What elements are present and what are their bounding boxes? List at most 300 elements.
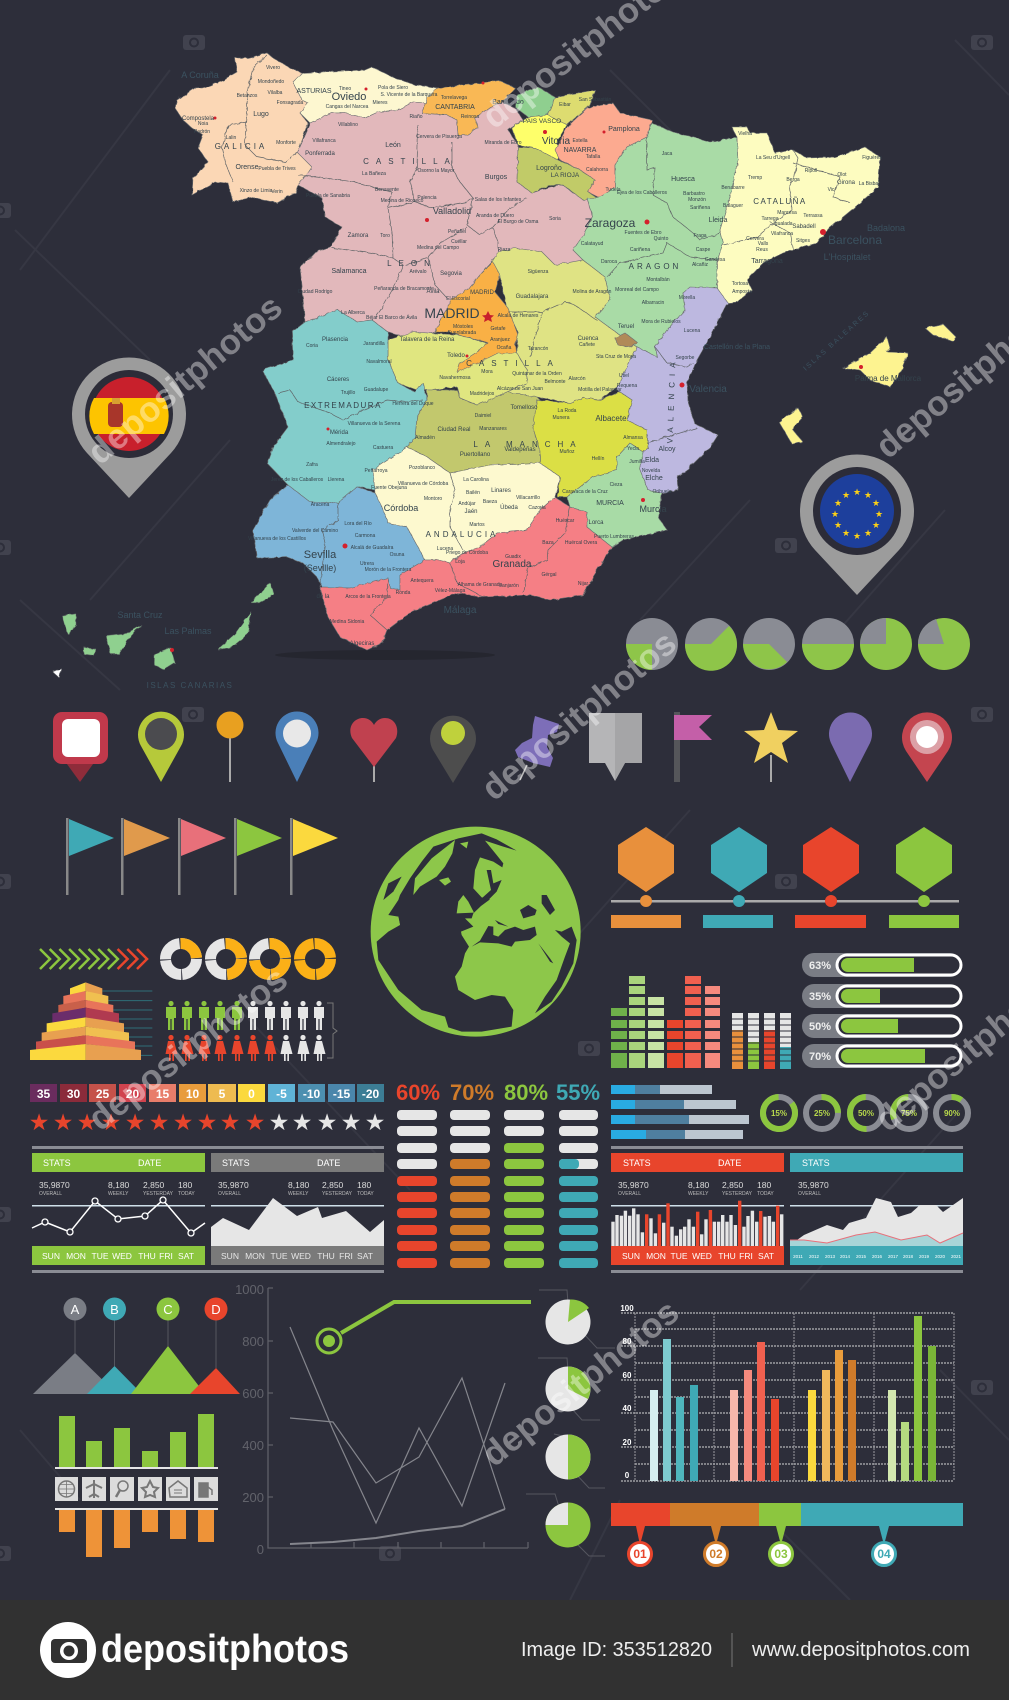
map labels: Salas de los Infantes xyxy=(475,197,522,203)
panel: teal stats area chart: 2012 xyxy=(809,1254,820,1259)
map labels: Berga xyxy=(786,177,800,183)
map labels: Riaza xyxy=(498,247,511,253)
map labels: Daimiel xyxy=(475,413,491,419)
temperature scale: 0 xyxy=(248,1087,255,1101)
map labels: Novelda xyxy=(642,468,660,474)
panel: red stats bar chart xyxy=(611,1153,784,1265)
map labels: Ciudad Real xyxy=(437,427,471,433)
panel: red stats bar chart: YESTERDAY xyxy=(722,1191,753,1197)
map labels: Sta Cruz de Moya xyxy=(596,354,636,360)
map labels: de la xyxy=(316,594,330,600)
EU flag: ★ xyxy=(842,529,850,539)
EU flag: ★ xyxy=(842,491,850,501)
panel: teal stats area chart xyxy=(790,1153,963,1265)
map labels: Riaño xyxy=(409,114,423,120)
image id: Image ID: 353512820 xyxy=(521,1639,712,1661)
map labels: Fraga xyxy=(693,233,707,239)
panel: grey stats area chart: YESTERDAY xyxy=(322,1191,353,1197)
map labels: Gérgal xyxy=(541,572,557,578)
map labels: Alcázar de San Juan xyxy=(497,386,543,392)
map labels: GALICIA xyxy=(215,142,267,151)
map labels: Alhama de Granada xyxy=(458,582,503,588)
map labels: MADRID xyxy=(470,290,494,296)
panel: green stats line chart xyxy=(32,1153,205,1265)
flag row xyxy=(66,818,338,895)
panel: green stats line chart: 8,180 xyxy=(108,1180,130,1190)
y axis labels: 400 xyxy=(242,1438,264,1453)
map labels: Plasencia xyxy=(322,337,349,343)
map labels: Alarcón xyxy=(569,376,586,382)
map labels: VALENCIA xyxy=(665,356,678,444)
map labels: Cangas del Narcea xyxy=(326,104,369,110)
map labels: MURCIA xyxy=(596,500,624,507)
map labels: Mérida xyxy=(330,430,349,436)
map labels: León xyxy=(385,142,401,149)
icon: blue pin xyxy=(276,711,318,782)
panel: grey stats area chart: SAT xyxy=(357,1251,373,1261)
EU flag: ★ xyxy=(853,488,861,498)
map labels: Barbastro xyxy=(683,191,705,197)
map labels: Tarancón xyxy=(528,346,548,352)
dark coastal labels: Málaga xyxy=(444,605,477,616)
map labels: Barakaldo xyxy=(492,99,524,106)
map labels: Sitges xyxy=(796,238,810,244)
panel: grey stats area chart xyxy=(211,1153,384,1265)
star rating: ★ xyxy=(341,1110,361,1136)
panel: grey stats area chart: STATS xyxy=(222,1158,250,1168)
panel: red stats bar chart: TODAY xyxy=(757,1191,774,1197)
panel: grey stats area chart: WED xyxy=(291,1251,311,1261)
depositphotos logo xyxy=(40,1622,349,1678)
map labels: Arcos de la Frontera xyxy=(345,594,391,600)
temperature scale: -20 xyxy=(362,1087,379,1101)
map labels: La Roda xyxy=(558,408,577,414)
map labels: Jaén xyxy=(464,509,478,515)
panel: green stats line chart: WEEKLY xyxy=(108,1191,129,1197)
map labels: Villanueva de los Castillos xyxy=(248,536,306,542)
grouped bar chart: 20 xyxy=(623,1438,632,1447)
map labels: Cervera de Pisuerga xyxy=(416,134,462,140)
map labels: Cuéllar xyxy=(451,239,467,245)
grouped bar chart: 80 xyxy=(623,1337,632,1346)
progress bars xyxy=(802,953,962,1068)
map labels: Carmona xyxy=(355,533,375,539)
map labels: Balaguer xyxy=(723,203,743,209)
dark coastal labels: ISLAS CANARIAS xyxy=(147,681,233,690)
map labels: Vielha xyxy=(738,131,752,137)
map labels: Guadalupe xyxy=(364,387,388,393)
map labels: Molina de Aragón xyxy=(573,289,612,295)
panel: green stats line chart: TUE xyxy=(92,1251,109,1261)
map labels: Jerez de los Caballeros xyxy=(271,477,324,483)
map labels: Segorbe xyxy=(676,355,695,361)
temperature scale: 5 xyxy=(219,1087,226,1101)
dark coastal labels: ISLAS BALEARES xyxy=(802,309,872,373)
grouped bar chart: 40 xyxy=(623,1404,632,1413)
map labels: Vilafranca xyxy=(771,231,793,237)
map labels: Herrera del Duque xyxy=(392,401,434,407)
EU flag xyxy=(820,474,894,548)
EU flag: ★ xyxy=(872,521,880,531)
map labels: Calahorra xyxy=(586,167,608,173)
panel: grey stats area chart: 35,9870 xyxy=(218,1180,249,1190)
EU flag: ★ xyxy=(831,510,839,520)
y axis labels: 800 xyxy=(242,1334,264,1349)
dark coastal labels xyxy=(117,70,905,690)
map labels: Alcoy xyxy=(658,446,676,453)
map regions xyxy=(53,53,956,678)
map labels: Ejea de los Caballeros xyxy=(617,190,668,196)
star rating: ★ xyxy=(365,1110,385,1136)
map labels: Reus xyxy=(756,247,768,253)
icons: globe, plane, search, star, house, fuel xyxy=(58,1480,212,1498)
map labels: Baeza xyxy=(483,499,497,505)
map labels: Puebla de Sanabria xyxy=(306,193,350,199)
map labels: Vitoria xyxy=(542,136,571,147)
map labels: Ocaña xyxy=(497,345,512,351)
map labels: LA RIOJA xyxy=(551,172,580,179)
panel: green stats line chart: SAT xyxy=(178,1251,194,1261)
map labels: Amposta xyxy=(732,289,752,295)
map labels: Cuenca xyxy=(578,336,599,342)
map labels: Vélez-Málaga xyxy=(435,588,466,594)
map labels: Daroca xyxy=(601,259,617,265)
watermarks: depositphotos xyxy=(80,287,290,472)
panel: green stats line chart: YESTERDAY xyxy=(143,1191,174,1197)
dark coastal labels: Castellón de la Plana xyxy=(704,344,770,351)
icon: purple drop xyxy=(829,712,872,782)
panel: teal stats area chart: STATS xyxy=(802,1158,830,1168)
icon: red square pin xyxy=(53,712,108,782)
panel: grey stats area chart: SUN xyxy=(221,1251,239,1261)
capital star xyxy=(482,311,494,322)
star rating: ★ xyxy=(292,1110,312,1136)
map labels: Murcia xyxy=(639,504,667,514)
panel: grey stats area chart: TUE xyxy=(270,1251,288,1261)
map labels: Tafalla xyxy=(586,154,600,160)
temperature scale: 15 xyxy=(156,1087,169,1101)
map labels: Béjar xyxy=(366,315,378,321)
star rating: ★ xyxy=(269,1110,289,1136)
icon: red target pin xyxy=(902,712,952,782)
map labels: Linares xyxy=(491,488,511,494)
map labels: Lorca xyxy=(588,520,604,526)
map labels: Padrón xyxy=(194,129,210,135)
map labels: Cariñena xyxy=(630,247,650,253)
map labels: Ciudad Rodrigo xyxy=(298,289,333,295)
grouped bar chart: 100 xyxy=(620,1304,634,1313)
map labels: Teruel xyxy=(618,324,634,330)
map labels: Gandesa xyxy=(705,257,725,263)
map labels: Lucena xyxy=(437,546,453,552)
map labels: ASTURIAS xyxy=(296,88,332,95)
map labels: Cervera xyxy=(746,236,764,242)
map labels: Muñoz xyxy=(559,449,575,455)
map labels: Benabarre xyxy=(721,185,745,191)
icon: star pin xyxy=(744,712,798,782)
map labels: Navahermosa xyxy=(439,375,471,381)
panel: green stats line chart: SUN xyxy=(42,1251,60,1261)
map labels: LEON xyxy=(387,259,437,268)
map labels: Motilla del Palancar xyxy=(578,387,622,393)
map labels: Osuna xyxy=(390,552,405,558)
map labels: El Burgo de Osma xyxy=(498,219,539,225)
icon: purple pushpin xyxy=(515,716,559,780)
map labels: Monzón xyxy=(688,197,706,203)
panel: teal stats area chart: 2013 xyxy=(825,1254,836,1259)
watermarks: depositphotos xyxy=(474,623,684,808)
map labels: CANTABRIA xyxy=(435,104,475,111)
star rating: ★ xyxy=(317,1110,337,1136)
map labels: Orihuela xyxy=(653,489,672,495)
map labels: Lleida xyxy=(709,217,727,224)
map labels: Martos xyxy=(469,522,485,528)
panel: red stats bar chart: WED xyxy=(692,1251,712,1261)
map labels: Madridejos xyxy=(470,391,495,397)
map labels xyxy=(182,65,922,647)
map labels: Talavera de la Reina xyxy=(400,337,455,343)
map labels: Verin xyxy=(271,189,283,195)
star rating: ★ xyxy=(149,1110,169,1136)
map labels: Manzanares xyxy=(479,426,507,432)
panel: grey stats area chart: TODAY xyxy=(357,1191,374,1197)
icon: orange ball pin xyxy=(216,712,244,782)
map labels: Villanueva de Córdoba xyxy=(398,481,448,487)
EU flag: ★ xyxy=(853,532,861,542)
y axis labels: 0 xyxy=(257,1542,264,1557)
star rating: ★ xyxy=(173,1110,193,1136)
map labels: CASTILLA xyxy=(466,359,560,368)
panel: red stats bar chart: 8,180 xyxy=(688,1180,710,1190)
map labels: Nijar xyxy=(578,581,588,587)
map labels: Vic xyxy=(828,187,835,193)
map labels: La Alberca xyxy=(341,310,365,316)
map labels: Osorno la Mayor xyxy=(418,168,455,174)
panel: green stats line chart: WED xyxy=(112,1251,132,1261)
map labels: ARAGON xyxy=(629,262,681,271)
panel: red stats bar chart: 35,9870 xyxy=(618,1180,649,1190)
map labels: Estella xyxy=(572,138,588,144)
temperature scale: 20 xyxy=(126,1087,139,1101)
ABCD triangle chart: A xyxy=(71,1302,80,1317)
map labels: Castuera xyxy=(373,445,393,451)
map labels: Requena xyxy=(617,383,637,389)
map labels: Peñaranda de Bracamonte xyxy=(374,286,434,292)
map labels: Miranda de Ebro xyxy=(485,140,522,146)
panel: grey stats area chart: WEEKLY xyxy=(288,1191,309,1197)
watermarks: depositphotos xyxy=(474,1292,686,1474)
globe xyxy=(371,827,581,1037)
EU flag: ★ xyxy=(834,521,842,531)
dark coastal labels: Barcelona xyxy=(828,233,882,247)
map labels: Huércal Overa xyxy=(565,540,597,546)
panel: green stats line chart: FRI xyxy=(159,1251,173,1261)
chevron arrows xyxy=(40,949,147,969)
map labels: Montalbán xyxy=(646,277,670,283)
map labels: Quinto xyxy=(654,236,669,242)
map labels: Huesca xyxy=(671,176,695,183)
map labels: Belmonte xyxy=(544,379,566,385)
map labels: Tremp xyxy=(748,175,762,181)
ABCD triangle chart xyxy=(33,1298,240,1394)
star rating xyxy=(29,1110,385,1136)
map labels: Pamplona xyxy=(608,126,640,133)
dark coastal labels: Badalona xyxy=(867,223,905,233)
map labels: Ripoll xyxy=(805,168,817,174)
map labels: Medina de Rioseco xyxy=(381,198,424,204)
star rating: ★ xyxy=(125,1110,145,1136)
panel: red stats bar chart: MON xyxy=(646,1251,666,1261)
donut gauges: 50% xyxy=(858,1109,874,1118)
map labels: Palma de Mallorca xyxy=(855,374,922,383)
temperature scale: -15 xyxy=(333,1087,350,1101)
map labels: Cáceres xyxy=(327,377,349,383)
map labels: Algeciras xyxy=(350,641,374,647)
map labels: Compostela xyxy=(182,116,215,122)
map labels: Elche xyxy=(645,475,663,482)
segmented bar with tags: 01 xyxy=(633,1547,647,1561)
percent headings: 80% xyxy=(504,1080,548,1105)
map labels: Getafe xyxy=(490,326,506,332)
map labels: (Seville) xyxy=(304,563,336,573)
map labels: Montoro xyxy=(424,496,442,502)
temperature scale: -10 xyxy=(303,1087,320,1101)
panel: grey stats area chart: DATE xyxy=(317,1158,340,1168)
dark coastal labels: L'Hospitalet xyxy=(824,252,871,262)
panel: teal stats area chart: 2019 xyxy=(919,1254,930,1259)
panel: red stats bar chart: SUN xyxy=(622,1251,640,1261)
map labels: Albarracin xyxy=(642,300,664,306)
map labels: Jarandilla xyxy=(363,341,385,347)
map labels: Jumilla xyxy=(629,459,645,465)
panel: grey stats area chart: THU xyxy=(317,1251,335,1261)
panel: grey stats area chart: FRI xyxy=(339,1251,353,1261)
map labels: Mieres xyxy=(372,100,388,106)
map labels: Priego de Córdoba xyxy=(446,550,488,556)
percent columns xyxy=(396,1080,600,1268)
map labels: CASTILLA xyxy=(363,157,457,166)
map labels: Lora del Río xyxy=(344,521,372,527)
hexagon timeline xyxy=(611,827,959,928)
map labels: Utiel xyxy=(619,373,629,379)
footer bar xyxy=(0,1600,1009,1700)
panel: green stats line chart: 2,850 xyxy=(143,1180,165,1190)
map labels: Navalmoral xyxy=(366,359,392,365)
panel: red stats bar chart: 2,850 xyxy=(722,1180,744,1190)
segmented bar with tags xyxy=(611,1503,963,1566)
map labels: Orense xyxy=(236,164,259,171)
panel: green stats line chart: 35,9870 xyxy=(39,1180,70,1190)
map labels: Jaca xyxy=(662,151,672,157)
dark coastal labels: Santa Cruz xyxy=(117,610,163,620)
map labels: Salamanca xyxy=(331,268,367,275)
panel: teal stats area chart: 2017 xyxy=(888,1254,899,1259)
panel: red stats bar chart: OVERALL xyxy=(618,1191,641,1197)
donut gauges: 90% xyxy=(944,1109,960,1118)
grouped bar chart: 60 xyxy=(623,1371,632,1380)
map labels: Segovia xyxy=(440,271,463,277)
map labels: Almendralejo xyxy=(326,441,356,447)
temperature scale: 10 xyxy=(186,1087,199,1101)
map labels: Utrera xyxy=(360,561,374,567)
map labels: Sigüenza xyxy=(528,269,549,275)
map labels: Yecla xyxy=(627,446,639,452)
map labels: Mora xyxy=(481,369,493,375)
map labels: Lalin xyxy=(226,135,236,141)
donut gauges: 15% xyxy=(771,1109,787,1118)
dark coastal labels: Las Palmas xyxy=(164,626,212,636)
map labels: Soria xyxy=(549,216,561,222)
map labels: S. Vicente de la Barquera xyxy=(381,92,438,98)
icon: lime pin xyxy=(138,712,184,782)
star rating: ★ xyxy=(53,1110,73,1136)
map labels: Logroño xyxy=(536,165,562,172)
green callout xyxy=(317,1302,531,1353)
progress bars: 70% xyxy=(809,1051,831,1063)
map labels: Baza xyxy=(542,540,554,546)
star rating: ★ xyxy=(220,1110,240,1136)
panel: teal stats area chart: 2014 xyxy=(840,1254,851,1259)
panel: red stats bar chart: STATS xyxy=(623,1158,651,1168)
pin: Spain flag xyxy=(72,357,186,498)
panel: red stats bar chart: 180 xyxy=(757,1180,771,1190)
panel: green stats line chart: STATS xyxy=(43,1158,71,1168)
map labels: Almadén xyxy=(415,435,435,441)
map labels: Granada xyxy=(493,559,532,570)
map labels: NAVARRA xyxy=(564,147,597,154)
map labels: Valdepeñas xyxy=(504,447,536,453)
map shadow xyxy=(275,650,495,660)
map labels: Antequera xyxy=(410,578,434,584)
map labels: Elda xyxy=(645,457,659,464)
map labels: Cieza xyxy=(610,482,623,488)
map labels: CATALUÑA xyxy=(753,197,807,206)
pin icons row xyxy=(53,711,952,783)
map labels: Valladolid xyxy=(433,206,471,216)
percent headings: 55% xyxy=(556,1080,600,1105)
map labels: Fuenlabrada xyxy=(448,330,476,336)
map labels: Quintanar de la Orden xyxy=(512,371,562,377)
map labels: Alcañiz xyxy=(692,262,709,268)
map labels: Aracena xyxy=(311,502,330,508)
map labels: Tarragona xyxy=(751,258,783,265)
map labels: Mondoñedo xyxy=(258,79,284,85)
map labels: Figuères xyxy=(862,155,882,161)
temperature scale: 25 xyxy=(96,1087,109,1101)
map labels: Móstoles xyxy=(453,324,473,330)
percent headings xyxy=(396,1080,600,1105)
segmented bar with tags: 03 xyxy=(774,1547,788,1561)
panel: grey stats area chart: MON xyxy=(245,1251,265,1261)
segmented bar with tags: 02 xyxy=(709,1547,723,1561)
map labels: Coria xyxy=(306,343,318,349)
EU flag: ★ xyxy=(864,529,872,539)
map labels: Sabadell xyxy=(792,224,816,230)
panel: teal stats area chart: 2016 xyxy=(872,1254,883,1259)
map labels: Caravaca de la Cruz xyxy=(562,489,608,495)
icon: dark pin xyxy=(430,716,476,783)
people pictogram xyxy=(166,1001,337,1061)
star rating: ★ xyxy=(29,1110,49,1136)
city markers xyxy=(170,82,863,652)
map labels: Aranda de Duero xyxy=(476,213,514,219)
panel: red stats bar chart: SAT xyxy=(758,1251,774,1261)
EU flag: ★ xyxy=(834,499,842,509)
stepped pyramid xyxy=(30,982,152,1060)
watermarks: depositphotos xyxy=(81,959,295,1138)
map labels: Tarrega xyxy=(762,216,779,222)
map labels: Lucena xyxy=(684,328,700,334)
